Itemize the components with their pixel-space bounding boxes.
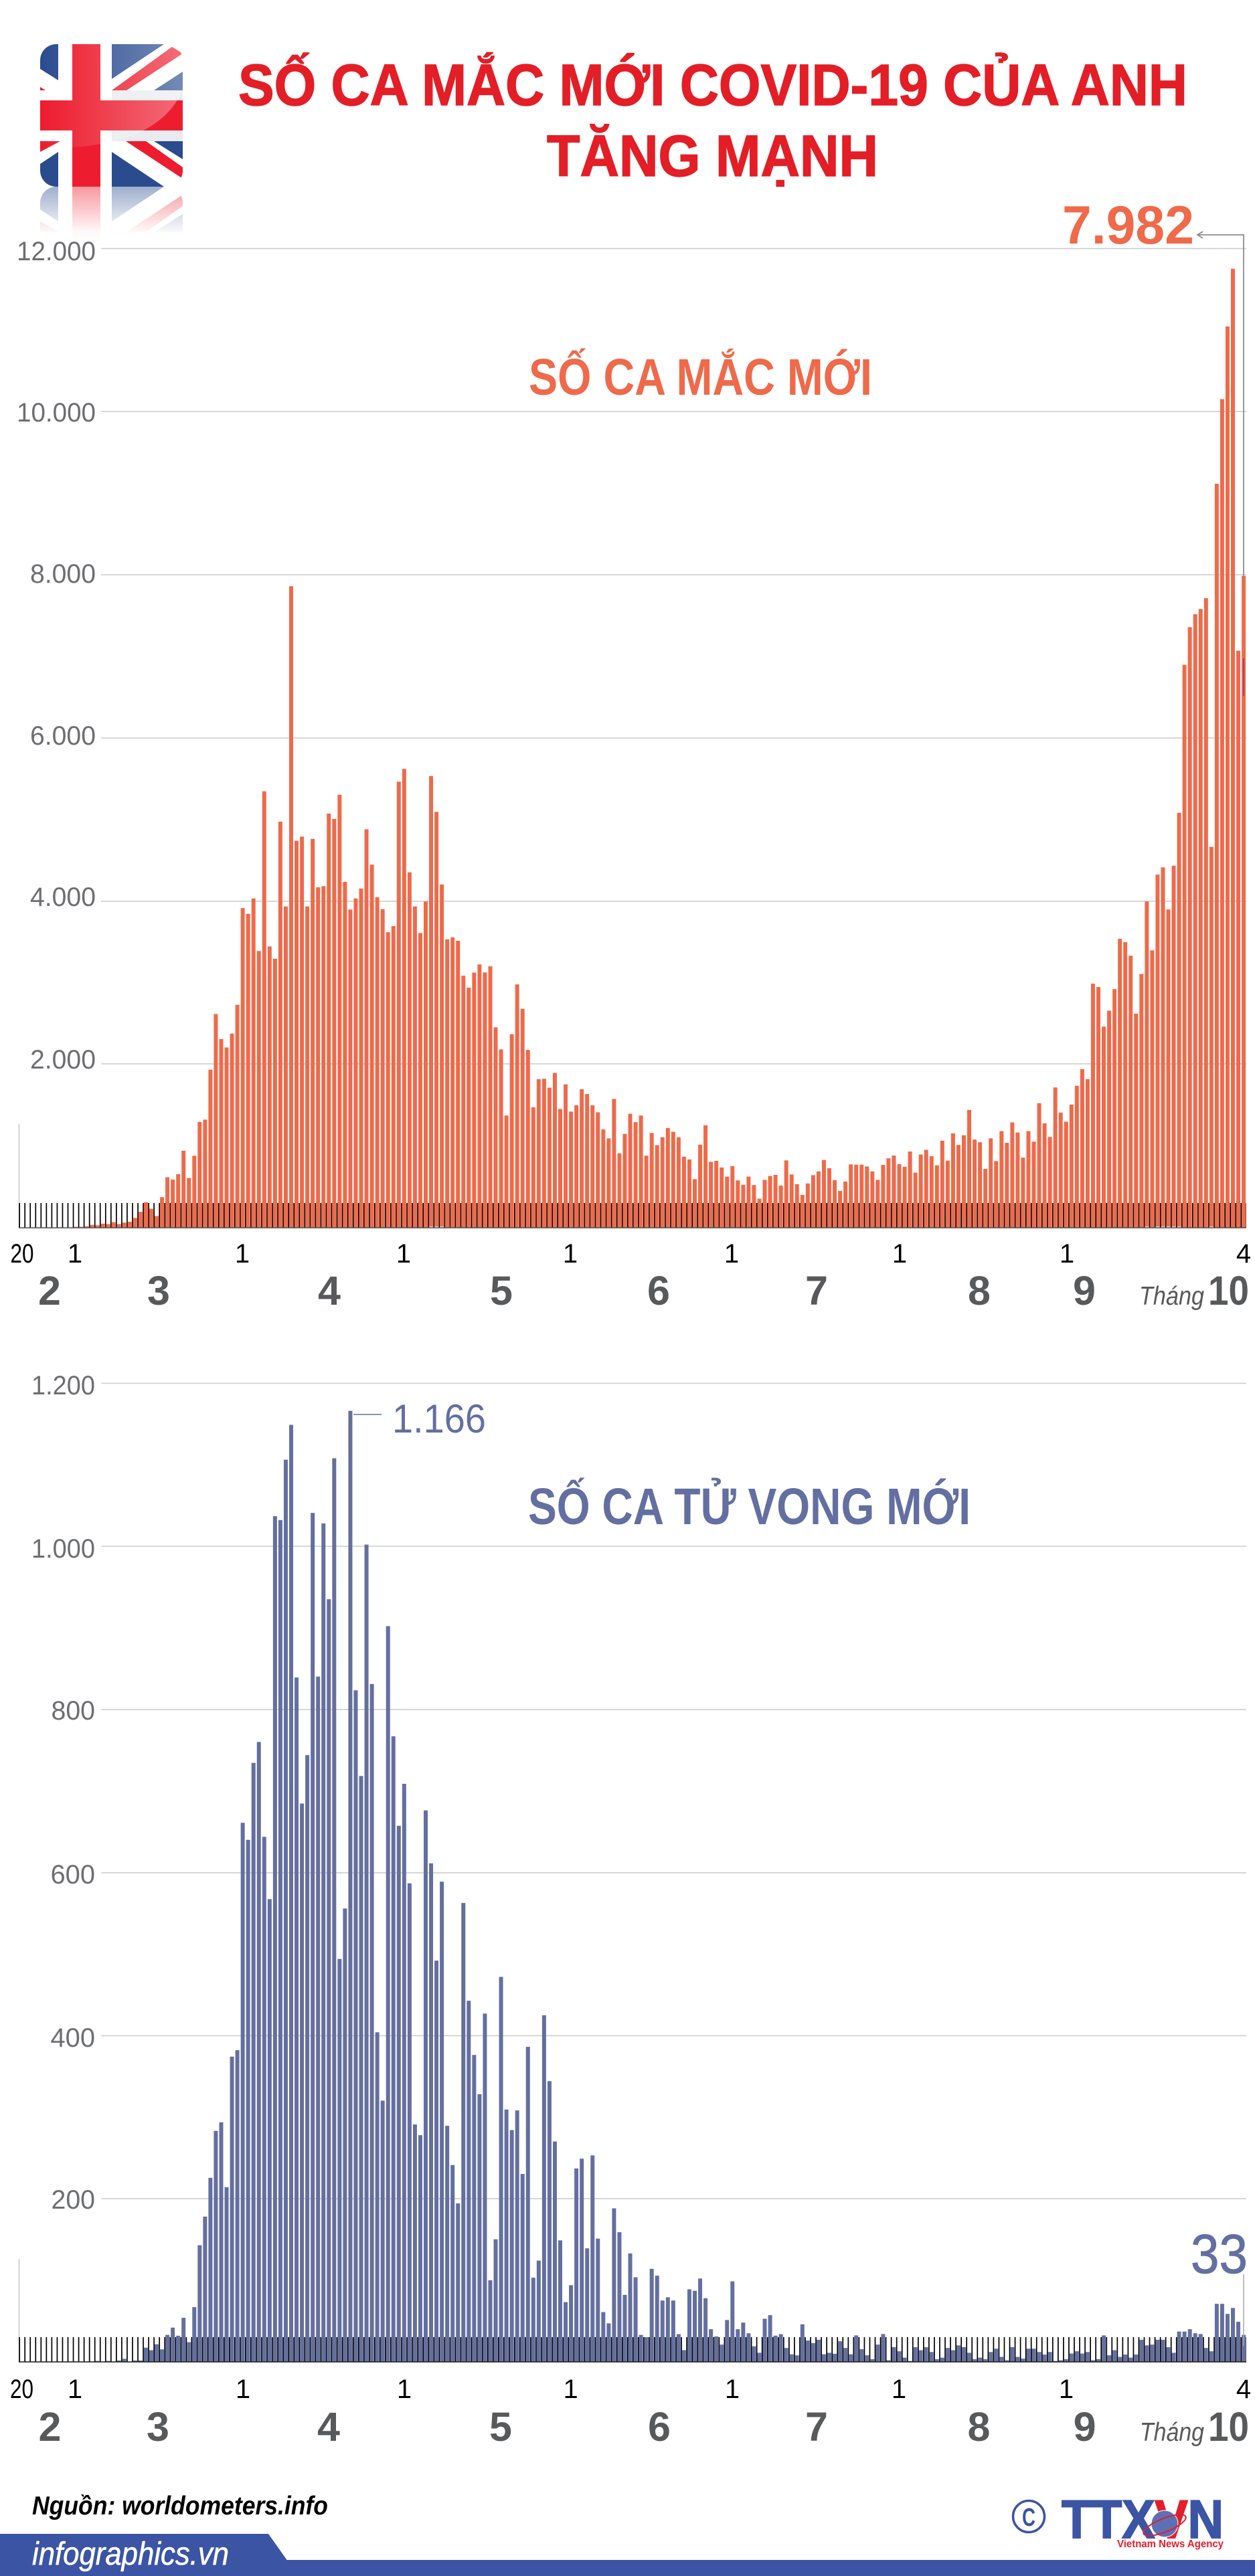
gridlines and axis	[19, 249, 1246, 1228]
month labels: new cases: 5	[490, 1268, 513, 1313]
y axis labels: new cases: 2.000	[30, 1045, 96, 1075]
bar chart: new cases	[76, 269, 1244, 1228]
day labels: new deaths: 1	[236, 2375, 250, 2404]
day labels: new cases: 1	[235, 1239, 250, 1269]
month labels: new deaths: 3	[147, 2404, 169, 2450]
month labels: new deaths: 8	[968, 2404, 990, 2450]
month labels: new cases: 2	[38, 1268, 61, 1313]
baseline	[19, 1227, 1246, 1228]
month labels: new deaths	[39, 2404, 1249, 2450]
day labels: new deaths: 1	[68, 2375, 82, 2404]
month labels: new deaths: 4	[317, 2404, 340, 2450]
month labels: new deaths: 6	[648, 2404, 671, 2450]
month labels: new cases	[38, 1268, 1249, 1313]
day labels: new deaths: 20	[10, 2375, 33, 2404]
month labels: new cases: 6	[647, 1268, 670, 1313]
y axis labels: new cases: 10.000	[17, 398, 96, 428]
month labels: new deaths: 10	[1208, 2404, 1249, 2450]
day labels: new cases: 1	[396, 1239, 411, 1269]
month labels: new deaths: Tháng	[1140, 2418, 1204, 2447]
y axis labels: new deaths	[31, 1371, 95, 2215]
month labels: new cases: 3	[147, 1268, 170, 1313]
y axis labels: new deaths: 1.200	[31, 1371, 95, 1400]
baseline	[19, 2361, 1246, 2363]
chart heading: new deaths: SỐ CA TỬ VONG MỚI	[528, 1477, 971, 1536]
month labels: new cases: 4	[318, 1268, 341, 1313]
day ticks: new deaths	[19, 2337, 1246, 2362]
day labels: new deaths: 1	[563, 2375, 578, 2404]
logo: TTXVN Vietnam News Agency: Vietnam News Agency	[1117, 2539, 1224, 2550]
day labels: new cases: 1	[724, 1239, 739, 1269]
month labels: new cases: 7	[805, 1268, 828, 1313]
y axis labels: new cases: 4.000	[30, 883, 96, 912]
gridlines and axis	[19, 1384, 1246, 2362]
month labels: new deaths: 2	[39, 2404, 61, 2450]
callout: 33 latest value: 33	[1191, 2223, 1248, 2285]
day labels: new cases: 20	[11, 1239, 33, 1269]
month labels: new deaths: 7	[805, 2404, 828, 2450]
day labels: new deaths: 4	[1236, 2375, 1251, 2404]
title	[238, 53, 1187, 189]
day labels: new cases	[11, 1239, 1251, 1269]
day labels: new deaths: 1	[1059, 2375, 1074, 2404]
chart heading: new cases: SỐ CA MẮC MỚI	[529, 348, 872, 406]
day ticks: new cases	[19, 1203, 1246, 1228]
day labels: new cases: 1	[1060, 1239, 1074, 1269]
title: TĂNG MẠNH	[547, 124, 878, 189]
y axis labels: new deaths: 400	[51, 2023, 95, 2053]
day labels: new deaths: 1	[892, 2375, 906, 2404]
title: SỐ CA MẮC MỚI COVID-19 CỦA ANH	[238, 53, 1187, 118]
y axis labels: new deaths: 600	[51, 1860, 95, 1890]
month labels: new cases: 9	[1073, 1268, 1096, 1313]
month labels: new deaths: 9	[1074, 2404, 1096, 2450]
day labels: new deaths: 1	[725, 2375, 740, 2404]
logo: TTXVN Vietnam News Agency: TTXVN	[1062, 2490, 1224, 2550]
month labels: new cases: 8	[968, 1268, 991, 1313]
day labels: new deaths	[10, 2375, 1251, 2404]
bar chart: new deaths	[98, 1410, 1244, 2363]
logo: TTXVN Vietnam News Agency: C	[1022, 2504, 1035, 2532]
y axis labels: new deaths: 800	[51, 1696, 95, 1726]
y axis labels: new cases: 8.000	[30, 559, 96, 589]
flag of the United Kingdom	[40, 44, 183, 232]
panel: new deaths chart	[10, 1371, 1251, 2450]
day labels: new cases: 4	[1236, 1239, 1251, 1269]
panel: new cases chart	[11, 195, 1251, 1313]
callout: 7.982 latest value	[1062, 195, 1244, 696]
y axis labels: new cases: 6.000	[30, 721, 96, 751]
y axis labels: new cases: 12.000	[17, 237, 96, 266]
y axis labels: new deaths: 1.000	[31, 1534, 95, 1564]
day labels: new cases: 1	[68, 1239, 82, 1269]
footer bar	[0, 2534, 1255, 2576]
month labels: new cases: 10	[1208, 1268, 1249, 1313]
month labels: new cases: Tháng	[1139, 1282, 1204, 1311]
footer bar: infographics.vn	[32, 2537, 229, 2572]
day labels: new cases: 1	[892, 1239, 907, 1269]
source note: Nguồn: worldometers.info	[32, 2492, 328, 2520]
day labels: new deaths: 1	[397, 2375, 412, 2404]
y axis labels: new cases	[17, 237, 96, 1075]
callout: 1.166 peak: 1.166	[392, 1396, 486, 1441]
y axis labels: new deaths: 200	[51, 2185, 95, 2215]
callout: 7.982 latest value: 7.982	[1062, 195, 1194, 256]
day labels: new cases: 1	[563, 1239, 578, 1269]
month labels: new deaths: 5	[489, 2404, 512, 2450]
